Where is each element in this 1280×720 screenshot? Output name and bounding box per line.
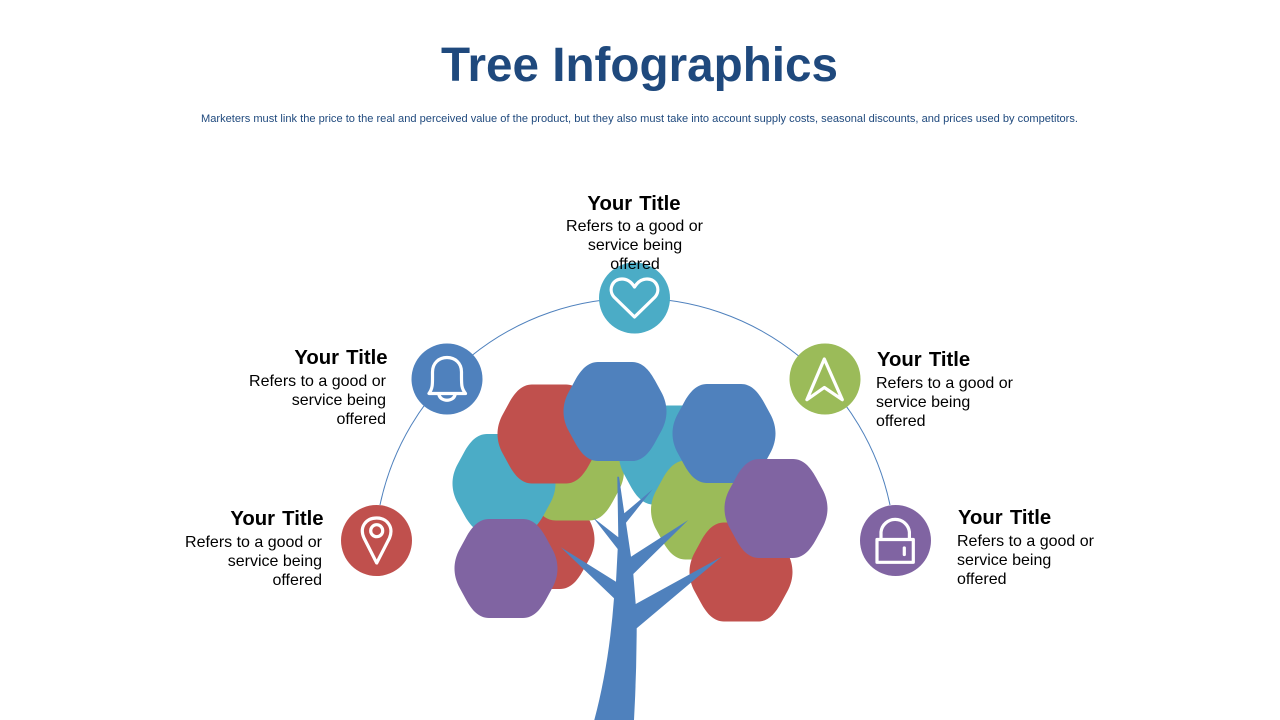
text block: upper-right item [876, 349, 1014, 430]
text block: top item [566, 193, 704, 273]
connector arc [380, 298, 890, 505]
text block: lower-right item: Refers to a good or [957, 533, 1095, 550]
subtitle text: Marketers must link the price to the real and perceived value of the product, but they also must take into account supply costs, seasonal discounts, and prices used by competitors. [201, 113, 1078, 125]
text block: upper-left item: Your Title [294, 347, 388, 369]
text block: lower-right item: Your Title [958, 507, 1051, 529]
text block: upper-right item: Your Title [877, 349, 970, 371]
text block: upper-left item [249, 347, 388, 428]
text block: lower-right item [957, 507, 1095, 588]
text block: top item: Your Title [587, 193, 681, 215]
icon: padlock (purple) [860, 505, 931, 576]
text block: top item: Refers to a good or [566, 218, 704, 235]
icon: navigation arrow (green) [790, 344, 860, 414]
icon: heart (teal) [599, 262, 670, 334]
text block: upper-right item: offered [876, 413, 926, 430]
text block: top item: service being [588, 237, 682, 254]
text block: lower-right item: service being [957, 552, 1051, 569]
title: Tree Infographics [441, 39, 838, 92]
text block: lower-left item: offered [272, 572, 322, 589]
text block: upper-right item: service being [876, 394, 970, 411]
text block: lower-right item: offered [957, 571, 1007, 588]
tree trunk and branches [561, 477, 722, 720]
text block: upper-left item: Refers to a good or [249, 373, 387, 390]
text block: lower-left item [185, 508, 324, 589]
text block: top item: offered [610, 256, 660, 273]
icon: location pin (red) [341, 505, 412, 576]
text block: lower-left item: Your Title [230, 508, 324, 530]
text block: lower-left item: Refers to a good or [185, 534, 323, 551]
tree crown of coloured hexagons [452, 362, 828, 622]
text block: upper-left item: offered [336, 411, 386, 428]
icon: bell (blue) [412, 344, 482, 414]
text block: upper-right item: Refers to a good or [876, 375, 1014, 392]
text block: lower-left item: service being [228, 553, 322, 570]
text block: upper-left item: service being [292, 392, 386, 409]
